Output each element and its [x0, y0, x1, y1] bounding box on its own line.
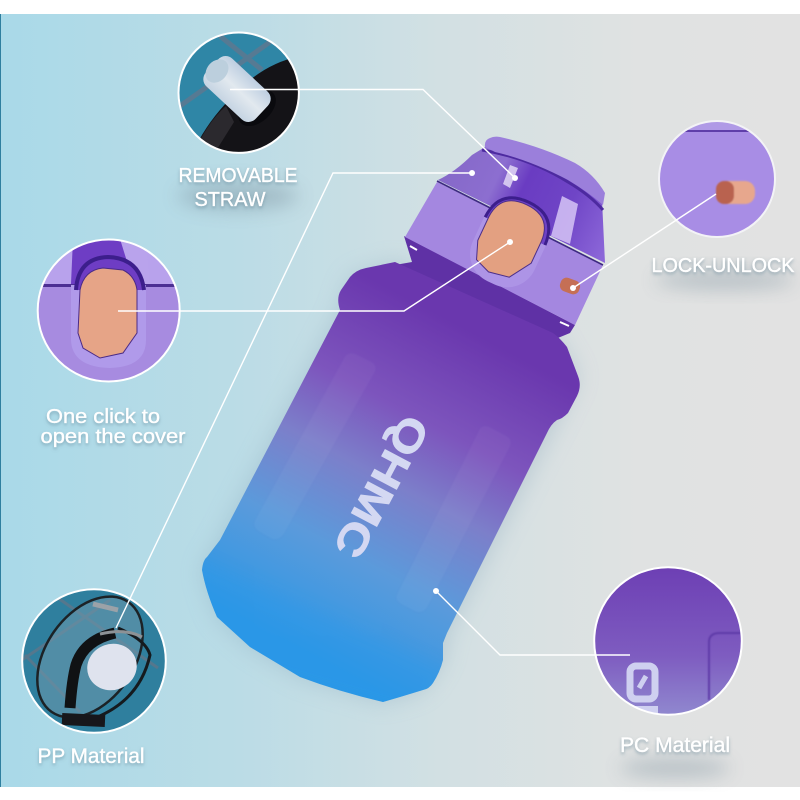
top lid	[485, 137, 605, 205]
line: PP material	[116, 173, 472, 628]
lock nub	[558, 276, 582, 296]
circle border	[178, 32, 299, 153]
dark lid seam	[482, 150, 603, 210]
clear lid window	[438, 147, 605, 263]
connector dots	[433, 170, 576, 594]
straw reflection	[503, 165, 518, 188]
cap window highlight	[551, 196, 578, 244]
connector lines	[116, 90, 716, 655]
label: open the cover: open the cover	[40, 426, 186, 448]
button dark arc	[485, 188, 559, 245]
bottle drop shadow	[202, 262, 578, 702]
cap button socket	[460, 187, 560, 297]
line: straw	[230, 90, 515, 178]
callout: open button	[37, 239, 181, 383]
callout: PP material	[21, 588, 167, 734]
label: lock-unlock: LOCK-UNLOCK	[652, 255, 795, 277]
photo: cover button	[37, 239, 181, 383]
peach button	[468, 192, 553, 287]
line: PC material	[436, 591, 630, 655]
label shadows	[178, 182, 795, 777]
circle border	[659, 121, 775, 237]
label: PP material: PP Material	[38, 745, 144, 768]
label: straw second line: STRAW	[194, 189, 266, 211]
bottle base shading	[202, 568, 440, 702]
callout: lock-unlock	[658, 120, 776, 238]
label: one click: One click to	[46, 406, 160, 428]
flange highlights	[410, 246, 569, 326]
cap band dark edge	[437, 181, 603, 265]
brand logo: QHMC	[325, 408, 439, 566]
cap band	[405, 182, 603, 325]
bottle body	[202, 262, 580, 702]
label: removable straw: REMOVABLE	[178, 165, 298, 187]
label: PC material: PC Material	[620, 734, 730, 757]
photo: bottle surface	[594, 567, 742, 718]
line: button	[118, 242, 510, 311]
circle border	[22, 589, 166, 733]
photo: lock nub	[658, 120, 776, 238]
circle border	[38, 240, 180, 382]
neck flange	[395, 236, 575, 340]
callout: PC material	[594, 567, 742, 718]
bottle	[180, 236, 580, 720]
photo: straw	[178, 32, 300, 154]
photo: lid inner	[23, 590, 165, 732]
line: lock	[573, 194, 716, 288]
callout: removable straw	[178, 32, 300, 154]
left grip panel	[254, 353, 376, 539]
circle border	[594, 567, 742, 715]
right grip panel	[396, 426, 511, 612]
bottle cap	[405, 137, 605, 326]
